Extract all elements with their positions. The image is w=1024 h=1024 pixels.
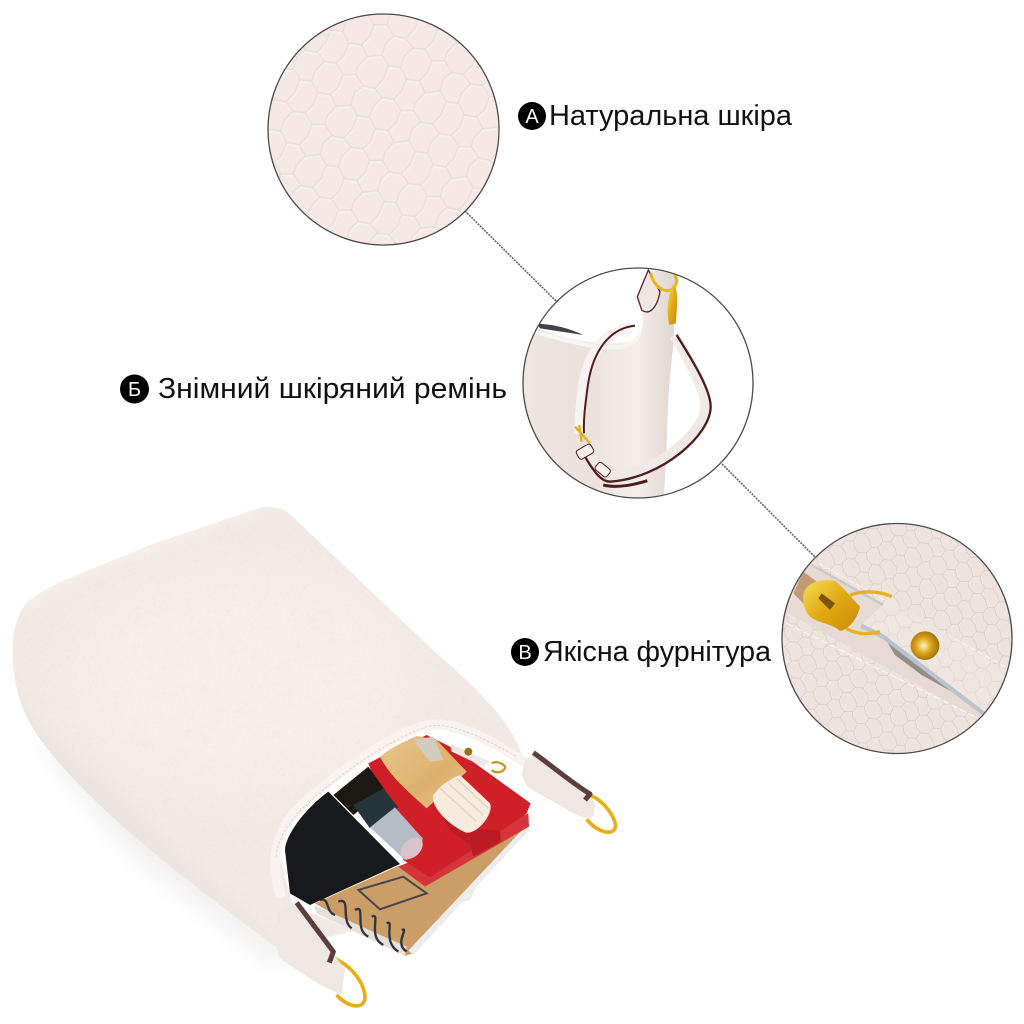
- right handle ring: [585, 793, 615, 832]
- bag body in strap circle: [520, 270, 677, 500]
- opening rim: [275, 724, 523, 893]
- red notebook: [368, 735, 531, 887]
- rivet: [911, 631, 939, 660]
- cosmetic tube: [333, 767, 427, 863]
- leather tab: [888, 642, 951, 692]
- black wallet: [285, 792, 400, 905]
- label: detachable leather strap: Б: [128, 379, 141, 401]
- bag interior: [278, 728, 537, 957]
- left handle ring: [332, 957, 365, 1006]
- zipper pull: [838, 592, 892, 634]
- bottle: [380, 736, 491, 833]
- product: bag: [0, 500, 615, 1006]
- inner pocket hardware: [450, 743, 490, 767]
- panel: hardware detail circle: [781, 522, 1013, 754]
- connector: circle A to circle B: [465, 211, 557, 302]
- bag opening and contents: [274, 724, 615, 1006]
- zipper channel: [786, 566, 980, 718]
- label: quality hardware: Якісна фурнітура: [543, 636, 772, 668]
- label: natural leather: Натуральна шкіра: [549, 100, 793, 132]
- label: detachable leather strap: Знімний шкіряний ремінь: [158, 373, 507, 405]
- label: quality hardware: В: [518, 642, 532, 664]
- panel: leather detail circle: [268, 14, 499, 245]
- strap: [580, 328, 632, 433]
- clasp: [651, 273, 677, 291]
- bag body: [12, 507, 530, 950]
- panel: detachable strap circle: [520, 260, 760, 500]
- label: natural leather: А: [525, 106, 539, 128]
- left handle tab: [274, 903, 345, 995]
- connector: circle B to circle C: [722, 464, 816, 558]
- notebook: [313, 825, 531, 956]
- right handle tab: [522, 756, 595, 818]
